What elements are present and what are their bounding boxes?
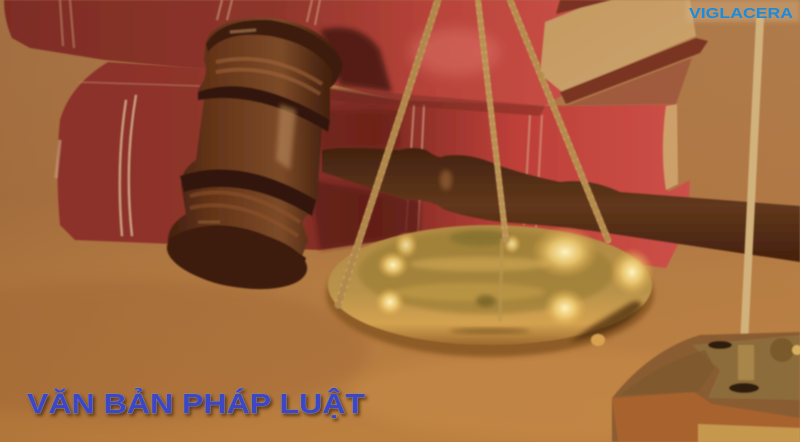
scale base [612,332,800,442]
gavel striking face [162,217,312,299]
gavel head [162,18,342,299]
upper collar [206,20,340,78]
lower collar [180,169,316,216]
gavel shadow on book [320,28,392,92]
title: VĂN BẢN PHÁP LUẬT [27,387,365,419]
upper red book [4,0,600,106]
gavel handle [322,148,800,262]
central barrel highlight [276,104,296,170]
lower red book [56,62,690,268]
scale pan [326,225,654,357]
book pages and cover [540,0,708,106]
brand logo: VIGLACERA [689,5,793,22]
scale strings [338,0,760,345]
brand logo [686,0,800,22]
